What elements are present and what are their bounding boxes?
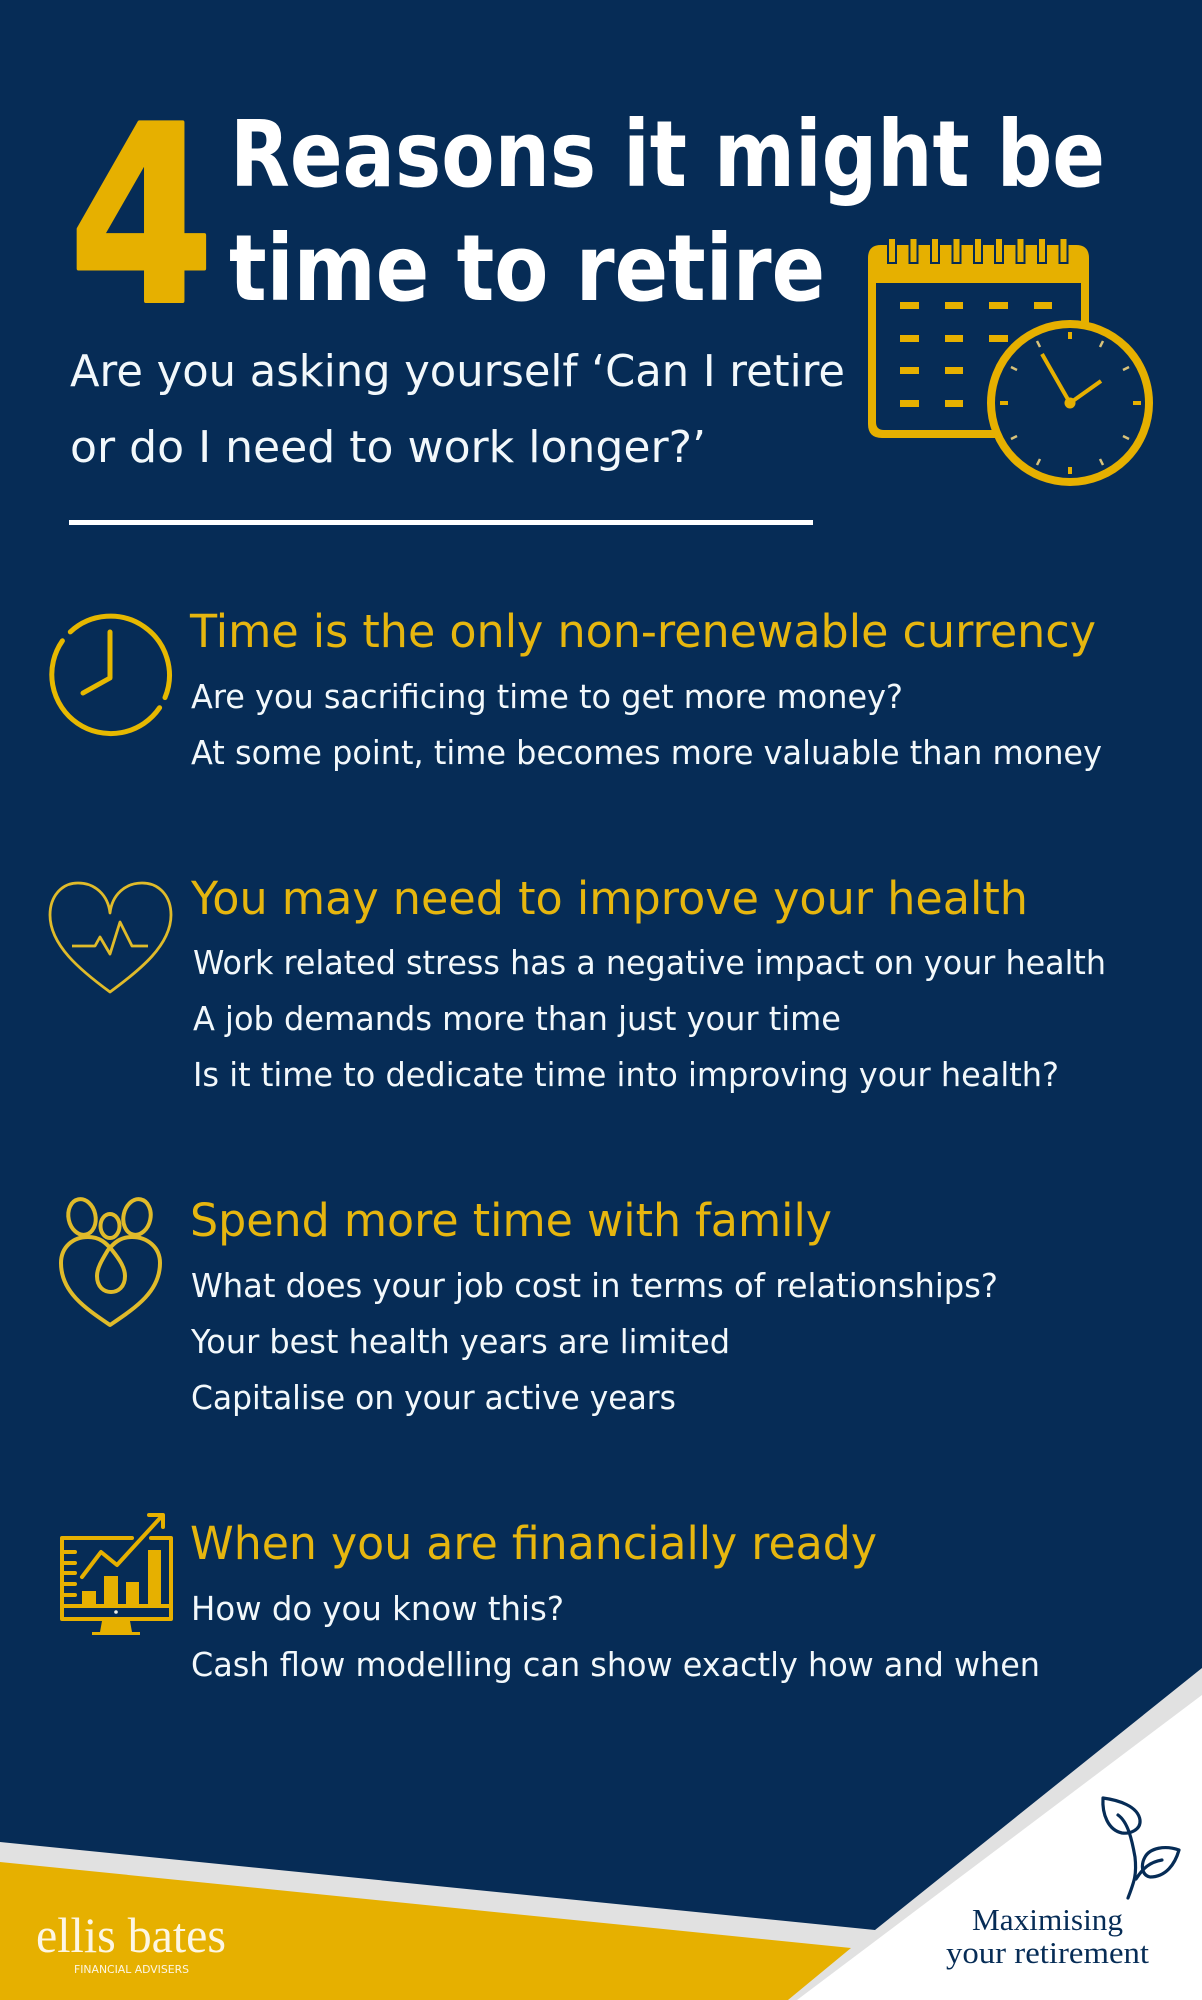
subtitle [70,346,845,473]
title: time to retire [229,215,825,322]
text: time: At some point, time becomes more valuable than money [191,733,1102,772]
heading: financially ready: When you are financially ready [190,1517,877,1570]
tagline: Maximising [972,1902,1123,1937]
text: family: Your best health years are limited [190,1322,730,1361]
text: time: Are you sacrificing time to get more money? [191,677,903,716]
footer corner: white [797,1695,1202,2000]
footer band: yellow [0,1862,851,2000]
title [229,101,1105,322]
icon: heart with pulse [50,883,171,992]
reason 4 [62,1515,1040,1684]
text: health: A job demands more than just your time [193,999,841,1038]
heading: family: Spend more time with family [190,1194,832,1247]
subtitle: Are you asking yourself ‘Can I retire [70,346,845,397]
heading: health: You may need to improve your health [190,872,1028,925]
text: health: Work related stress has a negative impact on your health [193,943,1106,982]
logo: ellis bates: FINANCIAL ADVISERS [74,1963,189,1976]
text: financially ready: Cash flow modelling can show exactly how and when [191,1645,1040,1684]
heading: time: Time is the only non-renewable currency [189,605,1096,658]
tagline: your retirement [946,1935,1149,1970]
text: family [190,1266,998,1417]
reason 3 [61,1194,998,1417]
icon: calendar and clock [868,238,1149,482]
logo: ellis bates: ellis bates [36,1907,226,1963]
text: family: What does your job cost in terms of relationships? [191,1266,998,1305]
subtitle: or do I need to work longer?’ [70,422,706,473]
big number 4: 4 [69,74,214,359]
text: financially ready: How do you know this? [191,1589,564,1628]
icon: clock [52,616,169,734]
tagline [946,1902,1149,1970]
icon: monitor with chart [62,1515,171,1635]
reason 1 [52,605,1102,772]
text: health [193,943,1106,1094]
icon: plant [1103,1798,1179,1898]
text: financially ready [191,1589,1040,1684]
text: time [191,677,1102,772]
text: family: Capitalise on your active years [191,1378,676,1417]
footer band: grey [0,1668,1202,2000]
icon: family heart [61,1197,160,1325]
text: health: Is it time to dedicate time into improving your health? [193,1055,1059,1094]
reason 2 [50,872,1106,1094]
